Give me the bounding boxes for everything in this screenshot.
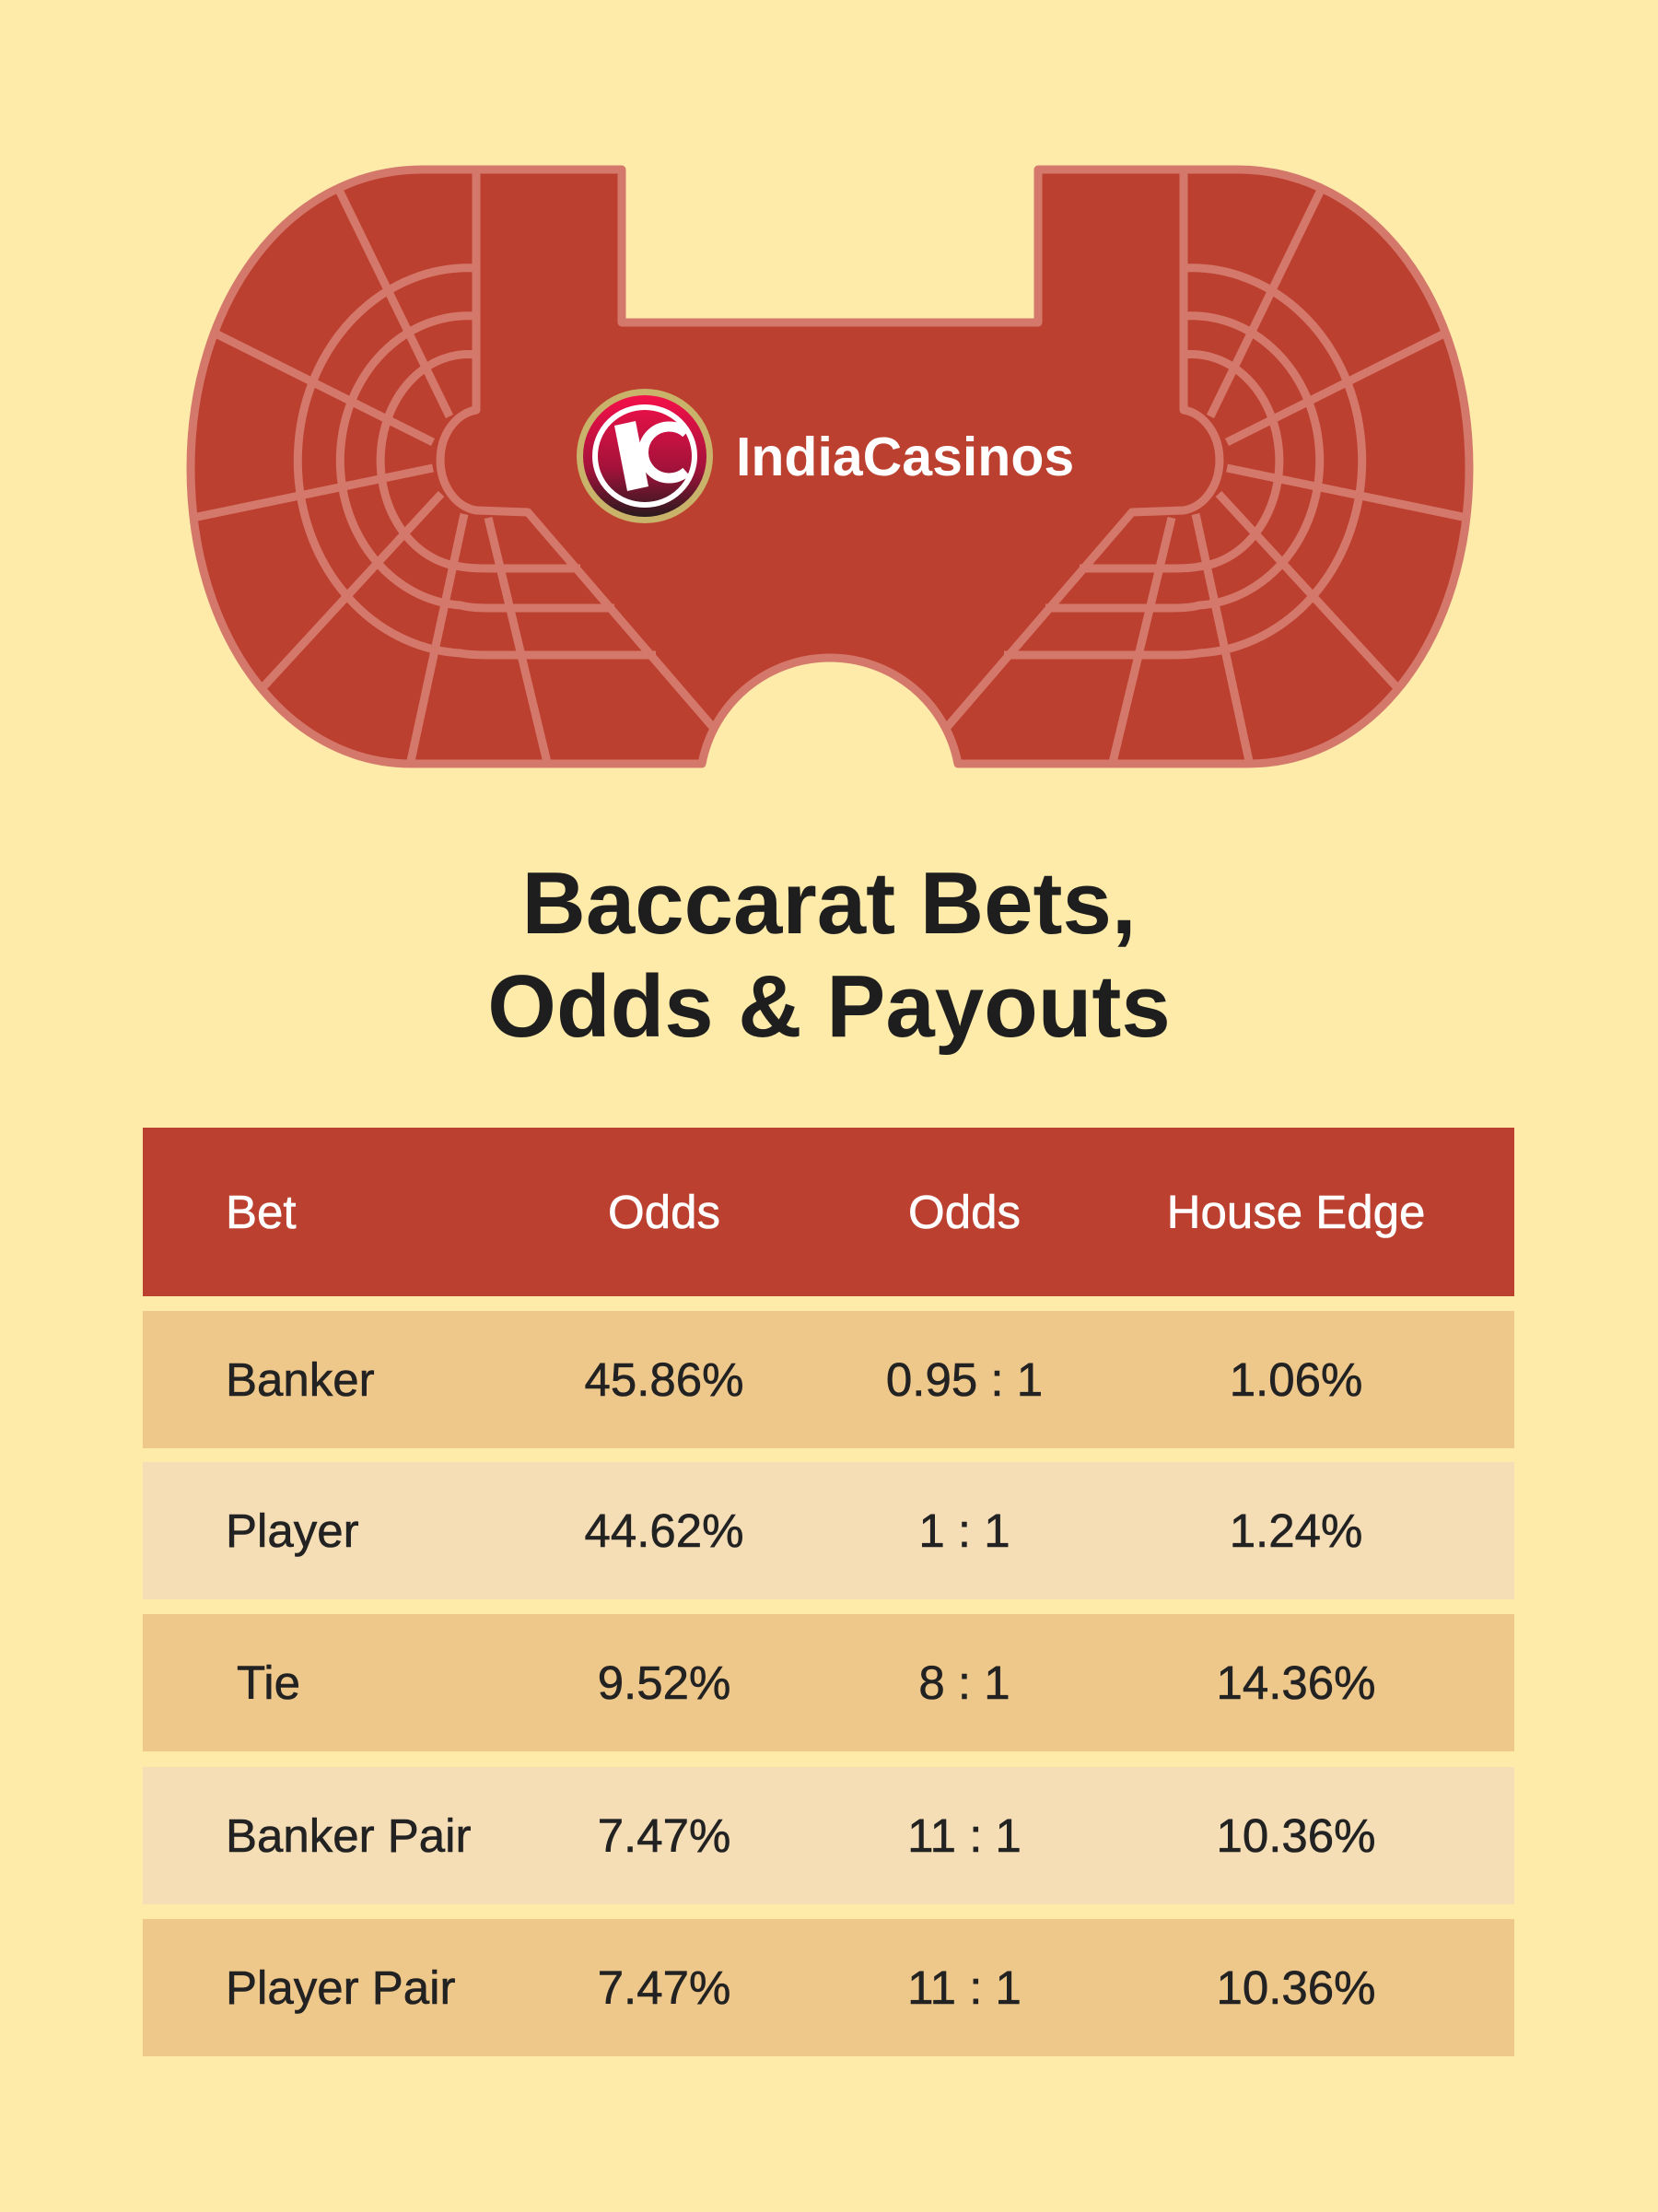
- title: Baccarat Bets,: [521, 854, 1137, 953]
- row: Player: 44.62%: [584, 1504, 743, 1557]
- table: header: Odds: [908, 1186, 1021, 1238]
- row: Player Pair: 10.36%: [1216, 1961, 1375, 2014]
- row: Tie: 8 : 1: [918, 1656, 1010, 1709]
- row: Banker Pair: [143, 1767, 1514, 1904]
- row: Tie: 14.36%: [1216, 1656, 1375, 1709]
- row: Player: 1.24%: [1230, 1504, 1362, 1557]
- title: [487, 854, 1171, 1056]
- table: header: [143, 1128, 1514, 1296]
- row: Tie: 9.52%: [598, 1656, 730, 1709]
- row: Banker: 0.95 : 1: [886, 1353, 1043, 1406]
- row: Banker: 45.86%: [584, 1353, 743, 1406]
- table: header: Odds: [608, 1186, 720, 1238]
- row: Tie: [143, 1614, 1514, 1751]
- row: Player: [143, 1462, 1514, 1599]
- row: Banker: 1.06%: [1230, 1353, 1362, 1406]
- row: Player Pair: [143, 1919, 1514, 2056]
- row: Banker Pair: 7.47%: [598, 1809, 730, 1862]
- table: header: Bet: [226, 1186, 297, 1238]
- table: header: House Edge: [1167, 1186, 1425, 1238]
- row: Banker Pair: Banker Pair: [226, 1809, 471, 1862]
- logo text: IndiaCasinos: [736, 427, 1074, 487]
- row: Player Pair: 11 : 1: [907, 1961, 1022, 2014]
- row: Player Pair: 7.47%: [598, 1961, 730, 2014]
- row: Player: Player: [226, 1504, 359, 1557]
- row: Player Pair: Player Pair: [226, 1961, 455, 2014]
- logo: IC badge: [577, 389, 713, 523]
- row: Tie: Tie: [237, 1656, 300, 1709]
- title: Odds & Payouts: [487, 957, 1171, 1056]
- row: Banker: [143, 1311, 1514, 1448]
- row: Banker Pair: 11 : 1: [907, 1809, 1022, 1862]
- row: Banker Pair: 10.36%: [1216, 1809, 1375, 1862]
- row: Banker: Banker: [226, 1353, 375, 1406]
- baccarat table illustration: [186, 166, 1474, 768]
- row: Player: 1 : 1: [918, 1504, 1010, 1557]
